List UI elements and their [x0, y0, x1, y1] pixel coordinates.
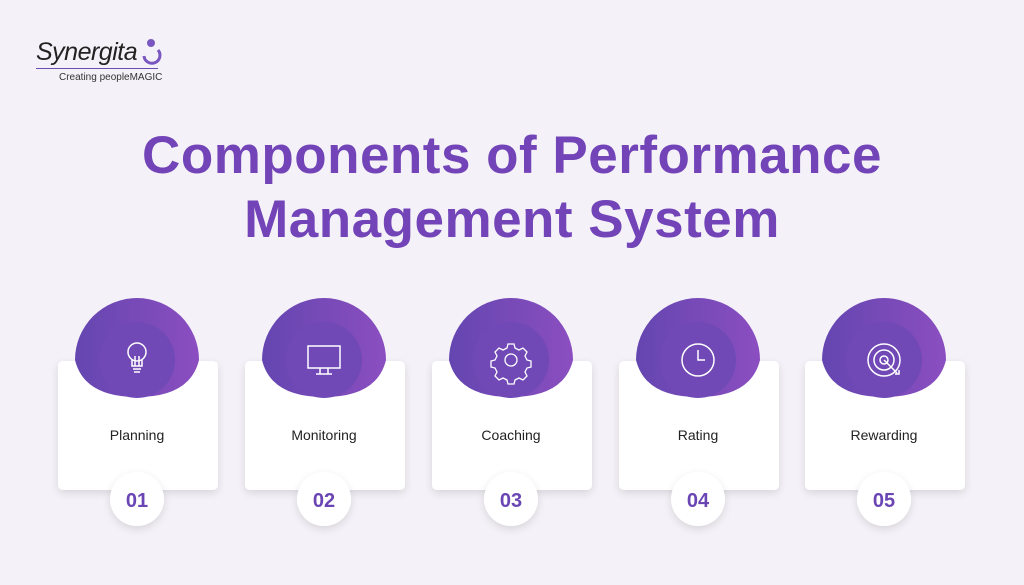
card: Rating: Rating	[678, 427, 718, 443]
card: Planning: 01	[126, 490, 148, 512]
title	[142, 126, 882, 249]
card: Coaching: Coaching	[481, 427, 541, 443]
icon: clock	[682, 344, 714, 376]
title: Components of Performance	[142, 126, 882, 185]
icon: bulb	[128, 343, 146, 372]
card: Rating	[619, 298, 779, 526]
card: Rewarding	[805, 298, 965, 526]
card: Rewarding: 05	[873, 490, 895, 512]
card: Coaching: 03	[500, 490, 522, 512]
logo: Creating peopleMAGIC	[59, 72, 162, 83]
card: Coaching	[432, 298, 592, 526]
card: Planning: Planning	[110, 427, 164, 443]
icon: target	[868, 344, 900, 376]
card: Rewarding: Rewarding	[851, 427, 917, 443]
logo	[36, 38, 162, 83]
icon: gear	[491, 344, 531, 384]
title: Management System	[244, 190, 780, 249]
card: Monitoring: 02	[313, 490, 335, 512]
logo: Synergita	[36, 38, 137, 66]
card: Monitoring	[245, 298, 405, 526]
card: Planning	[58, 298, 218, 526]
icon: monitor	[308, 346, 340, 374]
card: Monitoring: Monitoring	[291, 427, 357, 443]
card: Rating: 04	[687, 490, 710, 512]
